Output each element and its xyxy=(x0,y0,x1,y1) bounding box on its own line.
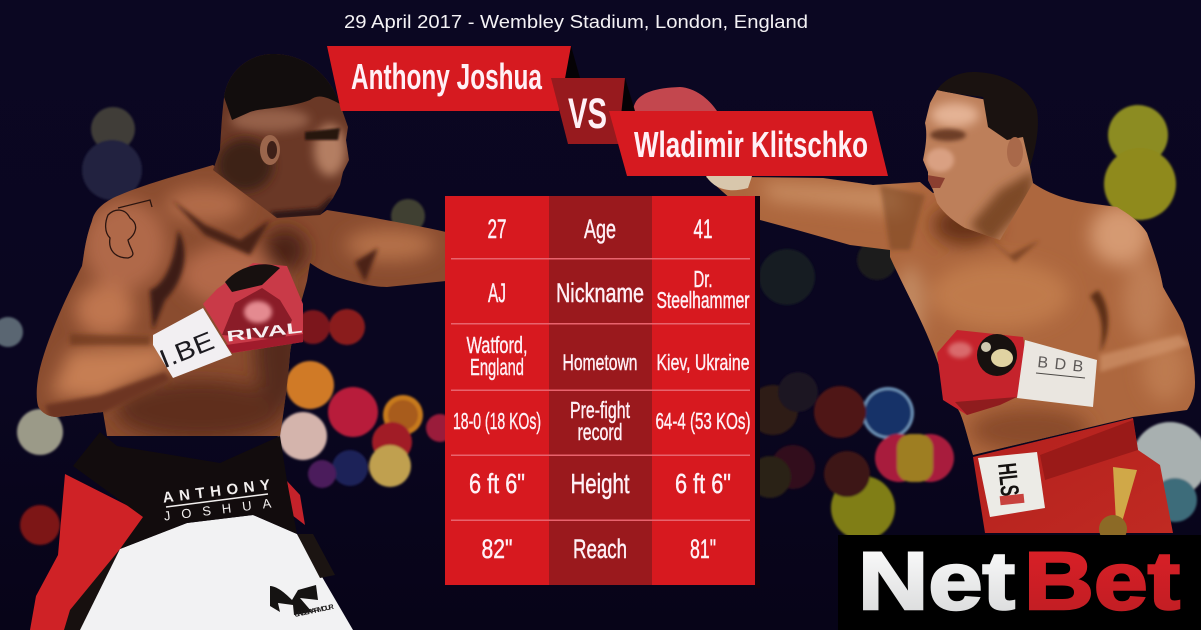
muscle shading xyxy=(45,187,435,440)
waistband name: ANTHONY xyxy=(162,477,271,507)
waistband name xyxy=(162,477,272,524)
rear hand wrap: B D B xyxy=(1037,354,1084,376)
row: hometown: Hometown xyxy=(562,350,638,375)
comparison table xyxy=(445,196,760,588)
row: hometown: England xyxy=(470,354,524,380)
hand wrap xyxy=(153,308,232,378)
row: nickname: Dr. xyxy=(694,266,712,292)
shorts xyxy=(30,474,150,630)
NetBet logo: Bet xyxy=(1024,536,1180,627)
lead glove xyxy=(633,87,717,111)
NetBet logo xyxy=(838,535,1201,630)
bokeh lights xyxy=(0,105,1201,545)
glove label: RIVAL xyxy=(226,319,303,346)
row: height: 6 ft 6" xyxy=(675,468,731,499)
shorts logo: UNDER ARMOUR xyxy=(294,604,335,619)
boxer: Wladimir Klitschko xyxy=(633,72,1195,543)
row: reach xyxy=(482,534,716,564)
row: pre-fight record xyxy=(453,397,750,445)
row: pre-fight record: Pre-fight xyxy=(570,397,630,423)
banner: VS: VS xyxy=(568,90,607,138)
row: nickname: AJ xyxy=(488,278,506,308)
NetBet logo: Net xyxy=(858,536,1015,627)
banner: Anthony Joshua xyxy=(327,46,580,111)
row: pre-fight record: record xyxy=(578,419,622,445)
shorts logo xyxy=(270,585,335,619)
hair xyxy=(937,72,1038,167)
glove badge xyxy=(977,334,1017,376)
waistband name: JOSHUA xyxy=(163,495,272,524)
ear xyxy=(1007,137,1023,167)
waistband xyxy=(73,432,297,549)
lead wrist wrap xyxy=(706,176,752,190)
banner: Wladimir Klitschko xyxy=(609,111,888,176)
shorts patch xyxy=(978,452,1045,517)
hair xyxy=(224,54,340,120)
row: hometown: Watford, xyxy=(466,332,528,358)
head xyxy=(923,90,1033,240)
muscle shading xyxy=(760,182,1190,452)
row: age: 27 xyxy=(488,214,506,244)
banner: Wladimir Klitschko: Wladimir Klitschko xyxy=(634,124,868,165)
row: hometown: Kiev, Ukraine xyxy=(656,350,750,375)
row: age xyxy=(488,214,712,244)
tattoo xyxy=(106,200,152,258)
banner: Anthony Joshua: Anthony Joshua xyxy=(351,56,543,97)
row: height: Height xyxy=(570,468,630,499)
row: nickname: Steelhammer xyxy=(656,287,750,313)
head xyxy=(213,54,349,218)
row: reach: 82" xyxy=(482,534,512,564)
shorts gold stripe xyxy=(1099,467,1137,543)
row: reach: Reach xyxy=(573,534,627,564)
row: hometown xyxy=(466,332,750,380)
row: pre-fight record: 18-0 (18 KOs) xyxy=(453,408,541,434)
glove xyxy=(203,263,303,353)
row: age: 41 xyxy=(694,214,712,244)
row: height xyxy=(469,468,731,499)
date and venue: 29 April 2017 - Wembley Stadium, London, England xyxy=(344,12,808,32)
row: reach: 81" xyxy=(690,534,716,564)
row: height: 6 ft 6" xyxy=(469,468,525,499)
hand wrap: I.BE xyxy=(155,325,218,374)
boxer: Anthony Joshua xyxy=(30,50,446,630)
shorts xyxy=(973,418,1173,533)
row: nickname: Nickname xyxy=(556,278,644,308)
row: age: Age xyxy=(584,214,616,244)
banner: VS xyxy=(551,78,635,144)
shorts patch: HLS xyxy=(992,461,1025,497)
rear glove xyxy=(937,330,1027,415)
row: pre-fight record: 64-4 (53 KOs) xyxy=(656,408,750,434)
rear hand wrap xyxy=(1017,340,1097,407)
torso and arms xyxy=(37,165,446,436)
ear xyxy=(260,135,280,165)
body and arms xyxy=(706,177,1195,455)
row: nickname xyxy=(488,266,750,313)
